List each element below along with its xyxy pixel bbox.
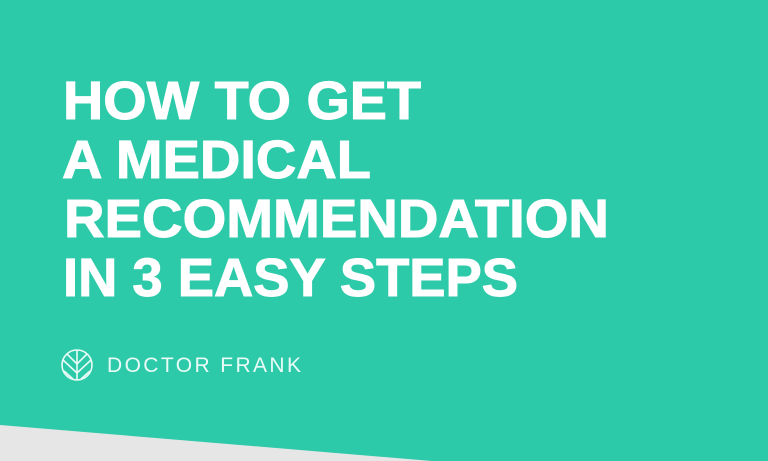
grey angled corner (0, 425, 432, 461)
logo (62, 350, 301, 380)
brand name: DOCTOR FRANK (107, 354, 301, 377)
title: HOW TO GET (63, 72, 421, 131)
title (62, 72, 609, 308)
title: IN 3 EASY STEPS (63, 249, 518, 308)
title: A MEDICAL (62, 131, 371, 190)
icon: leaf in circle (62, 350, 92, 380)
title: RECOMMENDATION (64, 190, 609, 249)
